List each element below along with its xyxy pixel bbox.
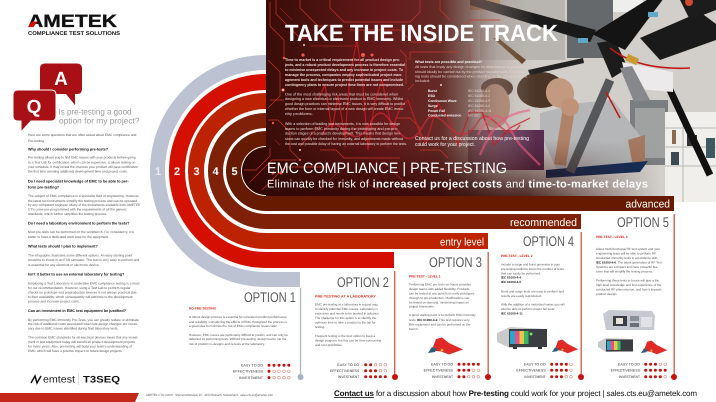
heading: is pre-testing a good option: option for my project?: [59, 116, 140, 126]
circuit traces: [244, 0, 500, 190]
text block: Q and A column: process and increase project costs.: [28, 300, 80, 304]
panel: option 2: design program, but this can be time-consuming: [315, 339, 381, 343]
logos: nemtest and teseq: emtest: [43, 374, 75, 386]
text block: Q and A column: would be to invest in an ESD simulator. This test is very easy to perform and: [28, 258, 139, 262]
panel: option 4: results are easily reproduced.: [501, 294, 542, 298]
panel: option 2: and cost-prohibitive.: [315, 343, 343, 347]
table: test standards: Burst: [428, 89, 438, 93]
panel: option 2: Frequent testing is the best option to keep a: [315, 334, 375, 338]
panel: option 4: PRE-TEST - LEVEL 2: [501, 254, 533, 258]
panel: option 1: A robust design process is essential for consistent product performance: [189, 315, 287, 319]
intro text block: duction stages of a product's development. This means that design revi-: [285, 132, 402, 136]
photo figure: engineer in grey shirt: [517, 72, 648, 178]
band numbers: 3: [193, 166, 200, 178]
intro text block: whether the form or internal layout of a new design will create EMC immu-: [285, 107, 405, 111]
waveform overlay: [318, 40, 540, 165]
table: test standards: Surge: [428, 104, 438, 108]
text block: possible tests: [415, 60, 527, 83]
panel: option 3: EFFECTIVENESS: [424, 368, 454, 372]
text block: Q and A column: to their availability, which consequently will add time to the development: [28, 295, 133, 299]
panel: option 3: design teams with added flexibility. Products: [409, 287, 470, 291]
panel: option 2: testing.: [315, 325, 325, 329]
panel: option 3: Performing EMC pre-tests on-house provides: [409, 282, 472, 286]
panel: option 3: little equipment and can be performed on the: [409, 322, 471, 326]
panel: option 2: expensive and needs to be booked in advance.: [315, 311, 380, 315]
panel: option 4: Burst and surge tests are easy to perform and: [501, 289, 564, 293]
table: test standards: Power Fail: [428, 109, 445, 113]
band numbers: 4: [212, 166, 219, 178]
heading: is pre-testing a good option: [58, 107, 140, 126]
panel: option 5: INVESTMENT: [619, 375, 641, 379]
icon: Q and A speech bubbles: Q: [27, 97, 41, 118]
panel: option 2: OPTION 2: [337, 274, 389, 290]
maroon overlay gradient: [242, 0, 531, 196]
panel: option 5: tures that will simplify the testing process.: [596, 270, 653, 274]
panel: option 4: OPTION 4: [523, 233, 574, 249]
panel: option 5: EFFECTIVENESS: [611, 368, 641, 372]
text block: possible tests: included:: [415, 79, 430, 83]
panel: option 2: optimum time to take a product to the lab for: [315, 321, 376, 325]
panel: option 5: Performing these tests in-house will give a the: [596, 278, 659, 282]
panel: option 5: [596, 214, 677, 380]
intro text block: sions can quickly be checked for immunity, and adjustments made without: [285, 137, 404, 141]
icon: ESD gun: [641, 341, 667, 354]
text block: Q and A column: is essential for any electrical or electronic device.: [28, 263, 100, 267]
text block: Q and A column: By performing EMC immunity Pre-Tests, you can greatly reduce or eliminate: [28, 318, 139, 322]
heading: is pre-testing a good option: Is pre-testing a good: [58, 107, 132, 117]
panel: option 3: bench.: [409, 327, 418, 331]
panel: option 3: PRE-TEST - LEVEL 1: [409, 275, 441, 279]
table: test standards: Continuous Wave: [428, 99, 457, 103]
logo: AMETEK: AMETEK: [28, 11, 117, 31]
panel: option 4: IEC 61000-4-11: [501, 312, 523, 316]
panel: option 5: OPTION 5: [617, 214, 669, 230]
contact callout on photo: Contact us for a discussion about how pre-testing: [415, 136, 529, 142]
text block: Q and A column: [28, 133, 141, 353]
panel: option 1: EASY TO DO: [241, 364, 263, 368]
intro text block: nity problems.: [285, 112, 313, 116]
photo figure: second engineer: [468, 78, 544, 170]
panel: option 2: PRE-TESTING AT A LABORATORY: [315, 294, 377, 298]
text block: Q and A column: What tests should I plan to implement?: [28, 244, 99, 248]
text block: Q and A column: Can an investment in EMC test equipment be justified?: [28, 309, 127, 313]
contact line: Contact us for a discussion about how Pre-testing could work for your project | sales.cts.eu@ametek.com: [334, 389, 697, 398]
text block: Q and A column: the risk of additional costs associated when late design changes are neces-: [28, 322, 138, 326]
text block: possible tests: All tests that imply any design changes for disturbance suppression: [415, 65, 527, 69]
intro text block: One of the most challenging risk areas that must be considered when: [285, 93, 398, 97]
panel: option 2: EMC pre-testing at a laboratory is a good way: [315, 302, 378, 306]
panel: option 5: PRE-TEST - LEVEL 3: [596, 235, 628, 239]
band 1: grey ring: [150, 55, 300, 287]
panel: option 4: IEC 61000-4-4: [501, 275, 521, 279]
dark lower fade: [242, 143, 653, 196]
panel: option 4: also be able to perform power fail tests:: [501, 307, 555, 311]
headline: EMC compliance pre-testing: EMC COMPLIANCE | PRE-TESTING: [267, 160, 507, 177]
band 3: entry level: [188, 93, 488, 249]
icon: burst generator instrument: [598, 338, 633, 352]
panel: option 3: through to pre-production. Modifications can: [409, 296, 470, 300]
band numbers: 1: [155, 166, 161, 178]
text block: Q and A column: Most pre-tests can be performed on the workbench. For consistency, it is: [28, 230, 134, 234]
band labels: advanced: [626, 198, 670, 210]
text block: Q and A column: standards, which further simplifies the testing process.: [28, 212, 107, 216]
intro text block: teams to perform EMC immunity during the prototyping and pre-pro-: [285, 127, 399, 131]
panel: option 4: IEC 61000-4-5: [501, 280, 521, 284]
intro text block: to minimise unexpected delays and any increase in project costs. To: [285, 68, 404, 72]
contact callout on photo: could work for your project.: [415, 142, 475, 148]
text block: Q and A column: The infographic illustrates some different options. An easy starting point: [28, 254, 132, 258]
intro text block: the cost and possible delay of having an external laboratory to perform the tests.: [285, 142, 407, 146]
band numbers: [155, 166, 238, 178]
text block: Q and A column: Employing a Test Laboratory to undertake EMC compliance testing is a must: [28, 282, 140, 286]
panel: option 3: EASY TO DO: [431, 362, 453, 366]
panel: option 5: engineering team will be able to perform RF: [596, 252, 656, 256]
contact callout on photo: [415, 136, 529, 148]
heading: take the inside track: TAKE THE INSIDE TRACK: [285, 20, 558, 46]
text block: possible tests: What tests are possible and practical?: [415, 60, 482, 64]
panel: option 4: EASY TO DO: [524, 362, 546, 366]
intro text block: good design practices can minimise EMC issues, it is very difficult to predict: [285, 102, 406, 106]
band numbers: 5: [231, 166, 238, 178]
band labels: entry level: [440, 236, 484, 248]
band 2: red ring: [169, 74, 394, 268]
intro text block: jects, and a robust product development process is therefore essential: [284, 63, 405, 67]
text block: Q and A column: by any competent engineer. Many of the instruments available from AMETEK: [28, 203, 141, 207]
logo: AMETEK: COMPLIANCE TEST SOLUTIONS: [28, 31, 120, 37]
text block: Q and A column: for many years. Also, pre-testing will build your team's understanding of: [28, 344, 132, 348]
text block: Q and A column: to a Test Lab for certification, which can be expensive, & allows testing on: [28, 160, 135, 164]
panel: option 2: INVESTMENT: [338, 375, 360, 379]
table: test standards: IEC 61000-4-11: [468, 109, 492, 113]
panel: option 4: Include a surge and burst generator in your: [501, 262, 560, 266]
panel: option 4: With the addition of a motorized variac you will: [501, 302, 565, 306]
panel: option 2: [315, 271, 398, 380]
text block: Q and A column: the first time avoiding additional development time and project costs.: [28, 170, 128, 174]
intro text block: contingency plans to ensure project time-lines are not compromised.: [285, 83, 404, 87]
panel: option 5: IEC 61000-4-6. The latest generation of RF Test: [596, 260, 662, 264]
text block: possible tests: ing tests should be considered when deciding on the pre-tests to be: [415, 74, 527, 78]
table: test standards: [428, 89, 492, 118]
table: test standards: IEC 61000-4-4: [468, 89, 490, 93]
panel: option 5: Add a multi-functional RF test system and your: [596, 247, 660, 251]
icon: burst generator instrument: [497, 327, 547, 349]
icon: ESD gun: [428, 338, 463, 354]
panel: option 2: to identify potential EMC issues. Laboratory is: [315, 307, 378, 311]
table: test standards: IEC 61000-4-2: [468, 94, 490, 98]
band 5: advanced: [226, 131, 674, 211]
text block: Q and A column: form pre-testing?: [28, 185, 60, 189]
icon: Q and A speech bubbles: A: [54, 69, 68, 90]
panel: option 1: [189, 288, 304, 380]
text block: possible tests: should ideally be carried out by the product manufacturer. The follow-: [415, 70, 527, 74]
text block: Q and A column: Pre-testing allows you to find EMC issues with your products before going: [28, 156, 136, 160]
intro text block: Time to market is a critical requirement for all product design pro-: [285, 58, 401, 62]
panel: option 3: [409, 252, 491, 380]
text block: Q and A column: The common EMC standards for all electrical devices mean that any invest-: [28, 336, 138, 340]
text block: Q and A column: The subject of EMC compliance is a specialist field of engineering. However,: [28, 194, 140, 198]
panel: option 1: a good idea to minimize the risk of EMC compliance issues later.: [189, 324, 278, 328]
panel: option 1: risk of product re-designs and re-tests at the laboratory.: [189, 342, 265, 346]
band 4: recommended: [208, 113, 581, 229]
panel: option 5: conducted RF phenomenon, and how it impacts: [596, 288, 662, 292]
table: test standards: Conducted emission: [428, 114, 461, 118]
footer address: AMETEK CTS GmbH · Sternenhofstrasse 15 · 4153 Reinach, Switzerland · sales.cts.eu@ametek.com: [146, 393, 273, 397]
panel: option 3: can be tested at any point from early prototypes: [409, 292, 475, 296]
icon: RF test system instrument: [603, 310, 655, 330]
panel: option 1: and reliability. Considering the effects of EMC throughout the process is: [189, 320, 287, 324]
panel: option 5: EASY TO DO: [618, 362, 640, 366]
table: test standards: IEC 61000-4-3: [468, 99, 490, 103]
panel: option 3: INVESTMENT: [432, 375, 454, 379]
panel: option 3: project timescales.: [409, 305, 435, 309]
text block: Q and A column: sary due to EMC issues identified during final laboratory tests.: [28, 326, 118, 330]
footer bar: [0, 393, 139, 402]
text block: Q and A column: Why should I consider performing pre-tests?: [28, 148, 109, 152]
text block: Q and A column: Do I need specialist knowledge of EMC to be able to per-: [28, 179, 129, 183]
text block: Q and A column: Do I need a laboratory environment to perform the tests?: [28, 222, 130, 226]
panel: option 2: EASY TO DO: [337, 363, 360, 367]
text block: Q and A column: Isn't it better to use an external laboratory for testing?: [28, 273, 125, 277]
panel: option 3: OPTION 3: [429, 254, 482, 270]
intro text block: manage the process, companies employ sophisticated project man-: [285, 73, 403, 77]
table: test standards: ESD: [428, 94, 436, 98]
intro text block: designing a new electrical or electronic product is EMC immunity. Whilst: [285, 97, 404, 101]
text block: Q and A column: for our recommendation. However, using a Test Lab to perform regular: [28, 286, 131, 290]
panel: option 1: EFFECTIVENESS: [233, 370, 264, 374]
band labels: [440, 198, 670, 248]
subtitle: eliminate the risk: Eliminate the risk of increased project costs and time-to-market delays: [267, 178, 648, 190]
intro text block: [284, 58, 407, 146]
panel: option 4: EFFECTIVENESS: [516, 368, 546, 372]
panel: option 1: detected by performing tests. Without pre-testing, design teams run the: [189, 337, 287, 341]
panel: option 1: However, EMC issues are particularly difficult to predict, and can only be: [189, 333, 288, 337]
panel: option 5: conducted immunity tests in accordance with: [596, 256, 658, 260]
panel: option 3: be tested on-demand, minimising impact on: [409, 300, 469, 304]
photo object: drone: [470, 0, 716, 175]
logos: nemtest and teseq: T3SEQ: [83, 374, 120, 386]
intro text block: With a selection of leading test instruments, it is now possible for design: [285, 122, 400, 126]
band numbers: 2: [174, 166, 180, 178]
text block: Q and A column: checks on prototype and preproduction devices is not always practical due: [28, 290, 137, 294]
panel: option 1: OPTION 1: [244, 289, 296, 305]
text block: Q and A column: CTS come pre-programmed with the requirements of all the generic: [28, 208, 127, 212]
panel: option 3: A good starting point is to perform ESD immunity: [409, 313, 476, 317]
panel: option 3: tests: IEC 61000-4-2. This test requires very: [409, 318, 470, 322]
panel: option 4: that can easily be performed:: [501, 271, 541, 275]
table: test standards: IEC 61000-4-5: [468, 104, 490, 108]
intro text block: agement tools and techniques to predict potential issues and include: [285, 78, 403, 82]
panel: option 5: Systems are compact and have powerful fea-: [596, 265, 658, 269]
panel: option 1: NO PRE-TESTING: [189, 307, 217, 311]
text block: Q and A column: Here are some questions that are often asked about EMC compliance and: [28, 133, 136, 137]
icon: Q and A speech bubbles: [13, 64, 82, 132]
panel: option 5: high-level knowledge and first experience of the: [596, 283, 662, 287]
panel: option 4: [497, 232, 584, 380]
photo background: workshop: [242, 0, 716, 202]
panel: option 4: INVESTMENT: [524, 375, 547, 379]
text block: Q and A column: ment in test equipment today will benefit all product development projects: [28, 340, 135, 344]
panel: option 4: pre-testing toolkit to boost the number of tests: [501, 267, 564, 271]
panel: option 5: product design.: [596, 292, 617, 296]
panel: option 2: EFFECTIVENESS: [330, 369, 360, 373]
text block: Q and A column: the latest test instruments simplify the testing process and can be operated: [28, 199, 137, 203]
icon: ESD gun: [552, 340, 578, 353]
logo: AMETEK: [28, 11, 120, 37]
text block: Q and A column: EMC, which will have a positive impact on future design projects.: [28, 349, 123, 353]
logos: nemtest and teseq: [31, 373, 120, 386]
panel: option 2: The challenge for this option is to identify the: [315, 316, 377, 320]
photo panel: drone engineers with circuit overlay: [242, 0, 716, 205]
text block: Q and A column: your schedule. It may reveal the chances your product will pass certification: [28, 165, 138, 169]
text block: Q and A column: better to have a dedicated work area for the equipment.: [28, 235, 109, 239]
band labels: recommended: [510, 217, 577, 229]
text block: Q and A column: Pre-testing: [28, 139, 44, 143]
table: test standards: EN 55C: [468, 114, 480, 118]
panel: option 1: INVESTMENT: [239, 376, 264, 380]
